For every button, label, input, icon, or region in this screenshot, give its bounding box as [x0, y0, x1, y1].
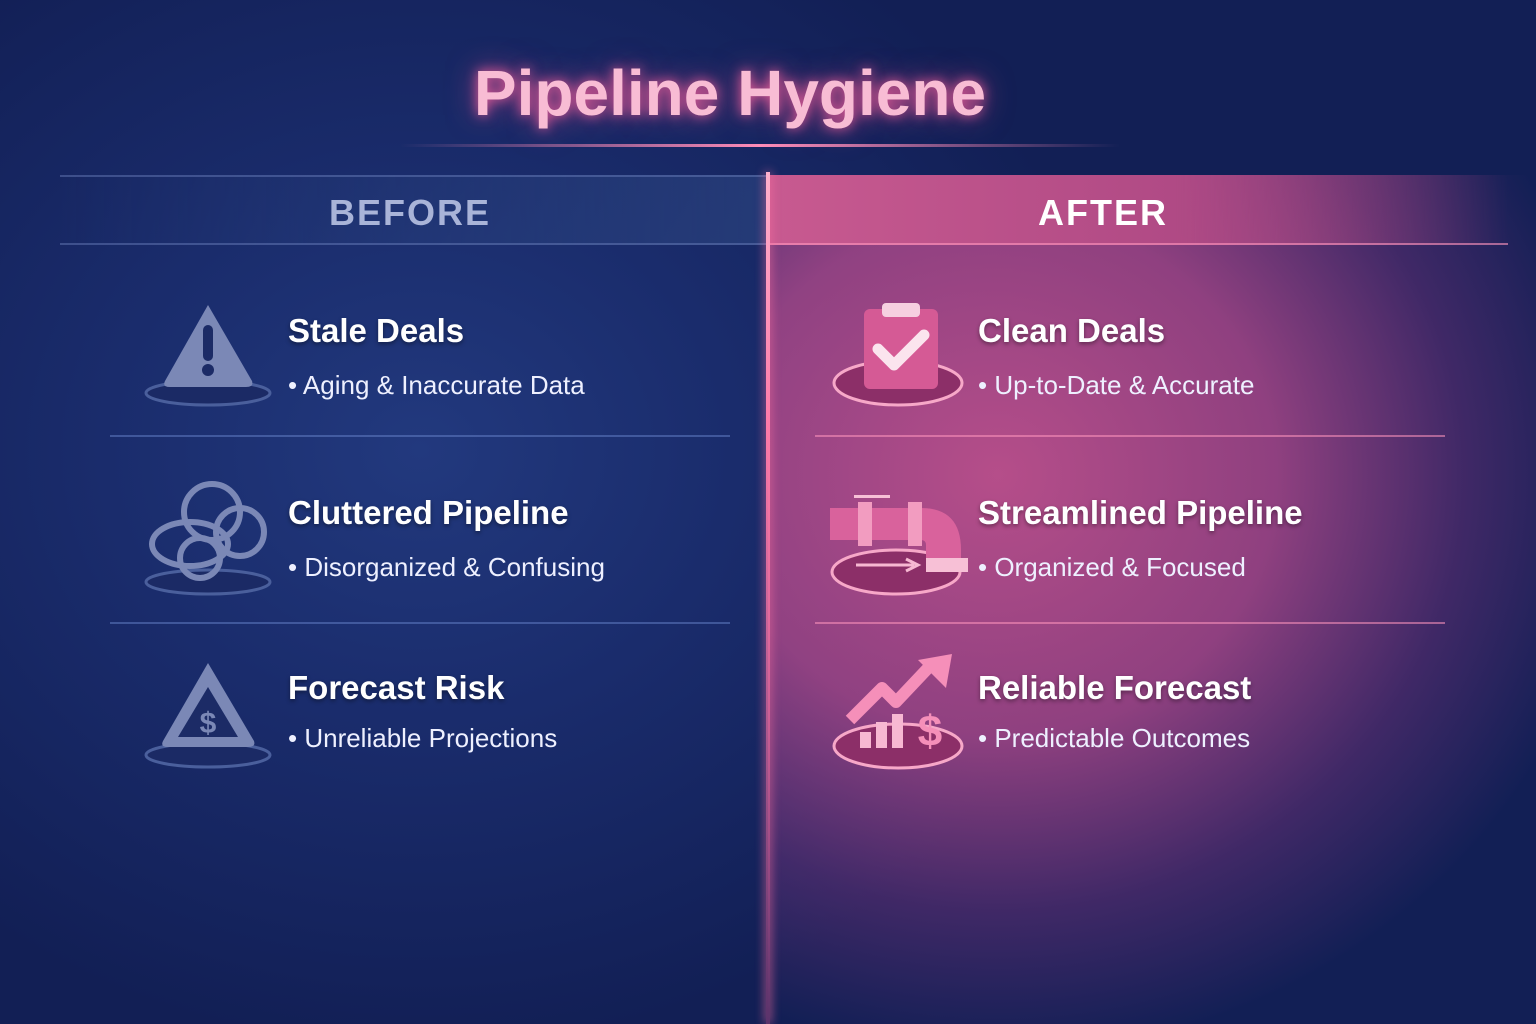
- item: stale deals: Stale Deals: [288, 312, 464, 349]
- row dividers: [110, 435, 730, 437]
- item: reliable forecast: Reliable Forecast: [978, 669, 1251, 706]
- icon: growth chart dollar: [832, 654, 964, 770]
- item: streamlined pipeline: Streamlined Pipeline: [978, 494, 1303, 531]
- icon: warning triangle: [144, 305, 272, 406]
- icon: growth chart dollar: $: [918, 707, 942, 756]
- item: forecast risk: [288, 669, 557, 753]
- icon: clipboard check: [832, 303, 964, 406]
- heading: after: AFTER: [1038, 192, 1168, 233]
- icon: tangled rings: [144, 481, 272, 596]
- icon: pipe: [830, 495, 968, 596]
- item: stale deals: [288, 312, 585, 400]
- title underline: [400, 144, 1120, 147]
- heading: before: BEFORE: [329, 192, 491, 233]
- item: clean deals: Clean Deals: [978, 312, 1165, 349]
- panel: after background: [768, 175, 1536, 1024]
- header band: before: [60, 175, 768, 245]
- item: clean deals: [977, 312, 1254, 400]
- icon: dollar triangle: $: [200, 707, 217, 740]
- header band: after: [768, 175, 1508, 245]
- item: forecast risk: Unreliable Projections: [304, 723, 557, 753]
- icon: dollar triangle: [144, 663, 272, 768]
- title: Pipeline Hygiene: [474, 57, 986, 129]
- item: stale deals: Aging & Inaccurate Data: [303, 370, 585, 400]
- item: cluttered pipeline: Disorganized & Confusing: [304, 552, 605, 582]
- item: clean deals: Up-to-Date & Accurate: [994, 370, 1254, 400]
- item: streamlined pipeline: [978, 494, 1303, 582]
- item: reliable forecast: [978, 669, 1252, 753]
- center divider line: [766, 172, 770, 1024]
- item: cluttered pipeline: Cluttered Pipeline: [288, 494, 569, 531]
- item: cluttered pipeline: [288, 494, 605, 582]
- item: streamlined pipeline: Organized & Focused: [994, 552, 1246, 582]
- item: forecast risk: Forecast Risk: [288, 669, 504, 706]
- item: reliable forecast: Predictable Outcomes: [994, 723, 1250, 753]
